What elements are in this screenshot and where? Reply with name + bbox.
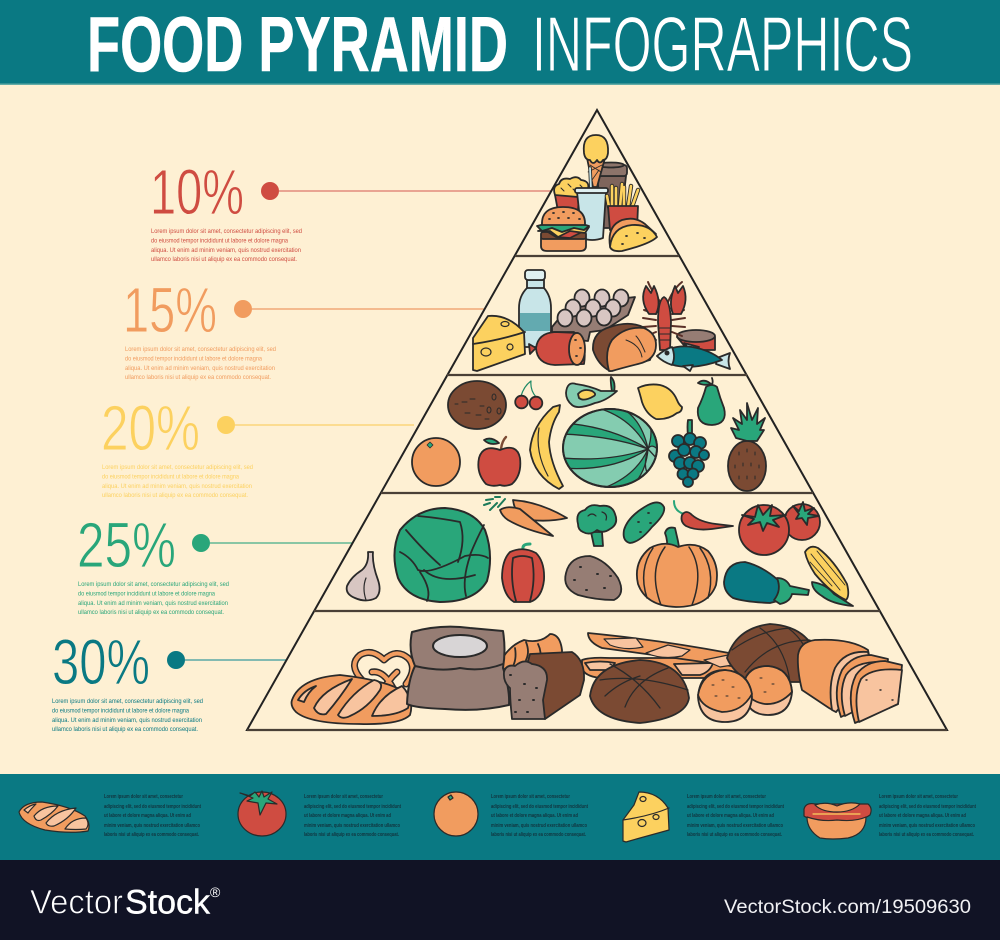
icon: bell pepper	[502, 544, 544, 602]
info item: tomato: Lorem ipsum dolor sit amet, consectetur	[304, 794, 384, 800]
info item: cheese: laboris nisi ut aliquip ex ea commodo consequat.	[687, 832, 782, 838]
title: FOOD PYRAMID	[87, 0, 508, 88]
icon: orange	[434, 792, 478, 836]
tier 2: dairy, protein	[473, 270, 730, 371]
info item: tomato	[238, 791, 401, 838]
icon: sliced loaf	[798, 640, 902, 723]
info item: hot dog: ut labore et dolore magna aliqua. Ut enim ad	[879, 813, 966, 819]
callout: 30 percent: do eiusmod tempor incididunt ut labore et dolore magna	[52, 708, 189, 714]
tier 5: breads and grains	[292, 624, 902, 724]
callout: 15 percent	[123, 274, 487, 381]
icon: long bread	[292, 675, 411, 724]
icon: eggplant	[724, 562, 809, 604]
icon: cabbage	[394, 508, 490, 602]
tier 3: fruits	[412, 377, 766, 491]
icon: burger	[537, 207, 589, 251]
icon: garlic	[347, 552, 380, 600]
info item: bread: minim veniam, quis nostrud exercitation ullamco	[104, 823, 200, 829]
icon: chili pepper	[674, 501, 733, 530]
callout: 20 percent: Lorem ipsum dolor sit amet, consectetur adipiscing elit, sed	[102, 464, 254, 471]
info item: hot dog: Lorem ipsum dolor sit amet, consectetur	[879, 794, 959, 800]
icon: croissant	[500, 634, 562, 672]
tier 4: vegetables	[347, 497, 853, 607]
icon: cucumber	[624, 502, 664, 543]
icon: baguette front	[588, 633, 751, 668]
logo: VectorStock: ®	[210, 884, 221, 900]
callout: 25 percent: ullamco laboris nisi ut aliquip ex ea commodo consequat.	[78, 609, 224, 616]
info item: cheese: minim veniam, quis nostrud exercitation ullamco	[687, 823, 783, 829]
info item: cheese: adipiscing elit, sed do eiusmod tempor incididunt	[687, 804, 784, 810]
callout: 10 percent: ullamco laboris nisi ut aliquip ex ea commodo consequat.	[151, 256, 297, 263]
header band	[0, 0, 1000, 88]
info item: cheese: Lorem ipsum dolor sit amet, consectetur	[687, 794, 767, 800]
footer bar	[0, 860, 1000, 940]
icon: buns	[698, 666, 792, 722]
callout: 25 percent	[77, 509, 352, 616]
callout: 10 percent: Lorem ipsum dolor sit amet, consectetur adipiscing elit, sed	[151, 228, 303, 235]
callout: 30 percent: ullamco laboris nisi ut aliquip ex ea commodo consequat.	[52, 726, 198, 733]
callout: 25 percent: do eiusmod tempor incididunt ut labore et dolore magna	[78, 590, 215, 598]
icon: brown loaf	[504, 652, 584, 719]
info item: orange: laboris nisi ut aliquip ex ea commodo consequat.	[491, 832, 586, 838]
callout: 10 percent: aliqua. Ut enim ad minim veniam, quis nostrud exercitation	[151, 247, 302, 254]
pyramid outline	[247, 110, 947, 730]
icon: apple	[478, 437, 520, 486]
callout: 15 percent: aliqua. Ut enim ad minim veniam, quis nostrud exercitation	[125, 365, 276, 372]
icon: coconut	[448, 381, 506, 429]
icon: flour sack	[407, 627, 509, 710]
source url: VectorStock.com/19509630	[724, 896, 971, 918]
icon: lemon	[638, 384, 682, 419]
callout: 30 percent: aliqua. Ut enim ad minim veniam, quis nostrud exercitation	[52, 717, 203, 724]
bottom band	[0, 774, 1000, 860]
logo: VectorStock	[30, 884, 221, 922]
info item: cheese	[623, 792, 784, 842]
icon: orange	[412, 438, 460, 486]
icon: cherries	[515, 381, 542, 409]
info item: orange: minim veniam, quis nostrud exercitation ullamco	[491, 823, 587, 829]
icon: french fries	[607, 184, 638, 230]
info item: bread: ut labore et dolore magna aliqua. Ut enim ad	[104, 813, 191, 819]
callout: 10 percent	[150, 156, 553, 263]
icon: grapes	[669, 420, 709, 487]
info item: orange: Lorem ipsum dolor sit amet, consectetur	[491, 794, 571, 800]
icon: soft drink	[575, 168, 608, 240]
logo: VectorStock: Vector	[30, 884, 123, 922]
callout: 20 percent	[101, 392, 414, 499]
info item: tomato: minim veniam, quis nostrud exercitation ullamco	[304, 823, 400, 829]
callout: 30 percent: Lorem ipsum dolor sit amet, consectetur adipiscing elit, sed	[52, 698, 204, 705]
info item: bread: adipiscing elit, sed do eiusmod tempor incididunt	[104, 804, 201, 810]
icon: broccoli	[577, 505, 616, 546]
icon: tin can	[677, 330, 715, 350]
icon: carrots	[484, 497, 567, 536]
callout: 15 percent: Lorem ipsum dolor sit amet, consectetur adipiscing elit, sed	[125, 346, 277, 353]
callout: 20 percent: do eiusmod tempor incididunt ut labore et dolore magna	[102, 474, 239, 480]
icon: ice cream	[584, 135, 608, 187]
callout: 25 percent: Lorem ipsum dolor sit amet, consectetur adipiscing elit, sed	[78, 581, 230, 588]
callout: 20 percent: 20%	[101, 392, 200, 464]
icon: taco	[610, 219, 657, 251]
icon: avocado	[566, 377, 617, 407]
icon: lobster	[643, 282, 686, 350]
info item: bread	[19, 794, 201, 838]
icon: cheese wedge	[473, 316, 525, 371]
callout: 10 percent: 10%	[150, 156, 244, 228]
icon: cheese	[623, 792, 669, 842]
icon: bread	[19, 802, 89, 832]
icon: banana	[530, 405, 563, 489]
info item: bread: laboris nisi ut aliquip ex ea commodo consequat.	[104, 832, 199, 838]
callout: 20 percent: aliqua. Ut enim ad minim veniam, quis nostrud exercitation	[102, 483, 253, 490]
callout: 15 percent: do eiusmod tempor incididunt ut labore et dolore magna	[125, 356, 262, 362]
info item: orange: adipiscing elit, sed do eiusmod tempor incididunt	[491, 804, 588, 810]
icon: tomato	[238, 791, 286, 836]
icon: milk bottle	[519, 270, 551, 347]
icon: dark round loaf front	[590, 660, 689, 723]
icon: sausage	[529, 332, 585, 365]
callout: 10 percent: do eiusmod tempor incididunt ut labore et dolore magna	[151, 238, 288, 244]
callout: 30 percent: 30%	[52, 626, 150, 698]
tier 1: sweets and fast food	[537, 135, 657, 251]
icon: fish	[657, 343, 730, 371]
icon: pear	[698, 378, 725, 425]
info item: orange	[434, 792, 588, 838]
callout: 15 percent: ullamco laboris nisi ut aliquip ex ea commodo consequat.	[125, 374, 271, 381]
info item: hot dog	[804, 794, 976, 839]
icon: ham	[593, 324, 656, 371]
info item: tomato: ut labore et dolore magna aliqua. Ut enim ad	[304, 813, 391, 819]
callout: 25 percent: aliqua. Ut enim ad minim veniam, quis nostrud exercitation	[78, 600, 229, 607]
callout: 25 percent: 25%	[77, 509, 176, 581]
callout: 15 percent: 15%	[123, 274, 217, 346]
icon: pumpkin	[637, 528, 717, 607]
icon: popcorn	[554, 177, 588, 211]
icon: potato	[565, 556, 621, 600]
info item: bread: Lorem ipsum dolor sit amet, consectetur	[104, 794, 184, 800]
icon: tomatoes	[739, 502, 820, 555]
callout: 30 percent	[52, 626, 286, 733]
icon: corn	[805, 547, 853, 606]
icon: coffee cup	[596, 162, 627, 228]
info item: cheese: ut labore et dolore magna aliqua. Ut enim ad	[687, 813, 774, 819]
callout: 20 percent: ullamco laboris nisi ut aliquip ex ea commodo consequat.	[102, 492, 248, 499]
info item: orange: ut labore et dolore magna aliqua. Ut enim ad	[491, 813, 578, 819]
icon: pretzel	[354, 652, 413, 692]
icon: pineapple	[728, 403, 766, 491]
icon: egg tray	[552, 290, 635, 341]
icon: watermelon	[562, 408, 662, 490]
info item: tomato: laboris nisi ut aliquip ex ea commodo consequat.	[304, 832, 399, 838]
icon: hot dog	[804, 803, 871, 839]
info item: tomato: adipiscing elit, sed do eiusmod tempor incididunt	[304, 804, 401, 810]
icon: dark round loaf back	[727, 624, 817, 682]
logo: VectorStock: Stock	[125, 884, 211, 922]
icon: baguette back	[582, 658, 751, 678]
